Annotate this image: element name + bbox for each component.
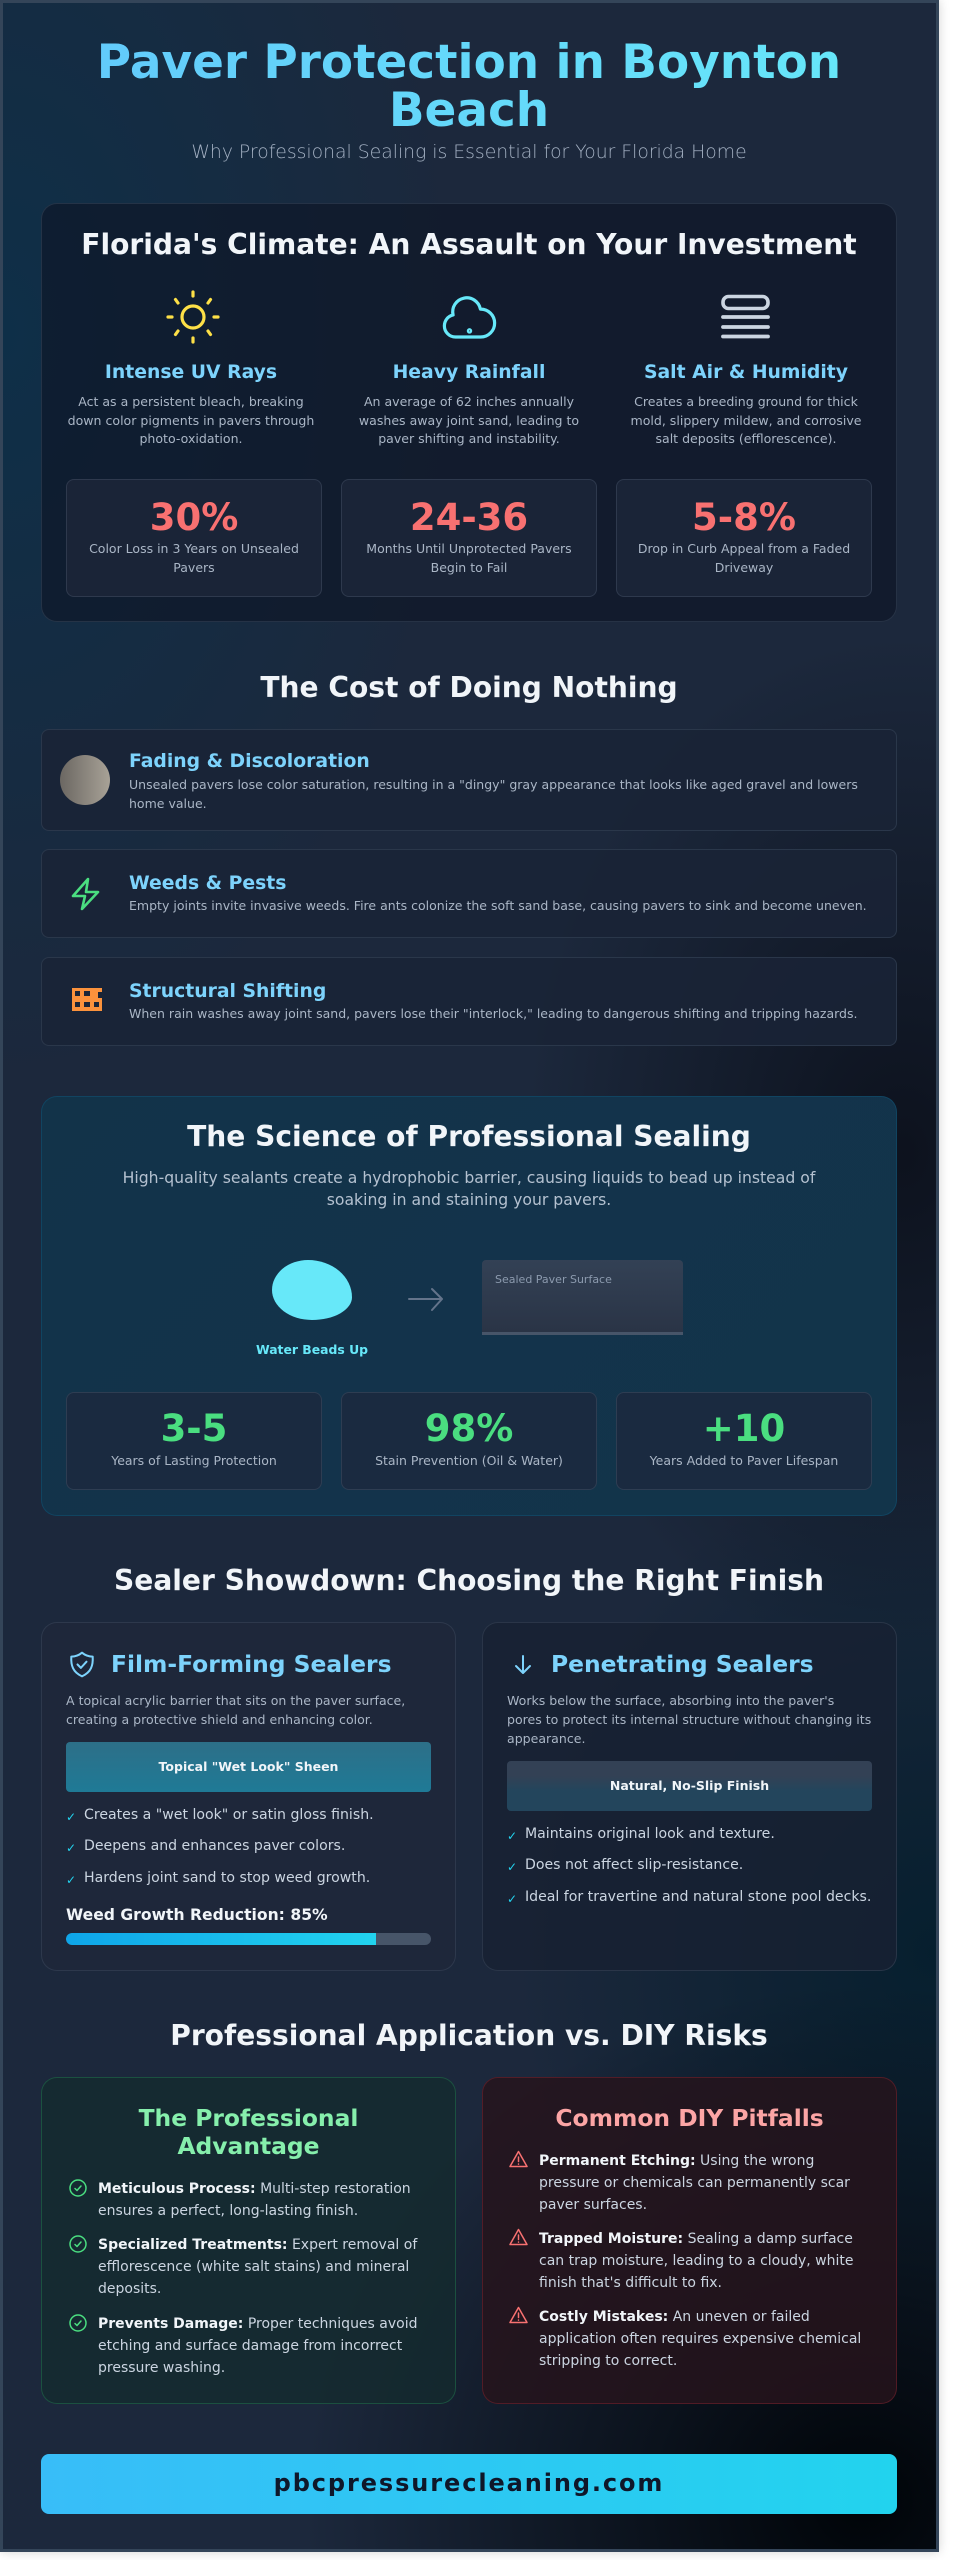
stat: stain <box>341 1392 597 1490</box>
card: professional advantage <box>41 2077 456 2404</box>
wet look sample <box>66 1742 431 1792</box>
pro item 3 <box>69 2314 418 2376</box>
card: fading <box>41 729 897 831</box>
pro item 1: ensures a perfect, long-lasting finish. <box>98 2203 358 2219</box>
pro item 2: Specialized Treatments: Expert removal of <box>98 2237 417 2253</box>
science text: soaking in and staining your pavers. <box>327 1190 611 1209</box>
pro item 2: efflorescence (white salt stains) and mineral <box>98 2259 409 2275</box>
stat: stain: 98% <box>425 1407 513 1450</box>
stat: months: Months Until Unprotected Pavers <box>366 541 572 556</box>
stat: months: 24-36 <box>410 496 528 539</box>
science heading: The Science of Professional Sealing <box>187 1120 751 1153</box>
weeds title: Weeds & Pests <box>129 873 286 894</box>
diy item 1: Permanent Etching: Using the wrong <box>539 2153 814 2169</box>
stat: color loss: Pavers <box>173 560 215 575</box>
fading text: home value. <box>129 796 207 811</box>
stat: years: 3-5 <box>161 1407 227 1450</box>
icon: bricks <box>72 988 102 1011</box>
fading text <box>129 777 858 811</box>
stat: stain: Stain Prevention (Oil & Water) <box>375 1453 563 1468</box>
stat: color loss: Color Loss in 3 Years on Unsealed <box>89 541 299 556</box>
progress bar <box>66 1933 431 1945</box>
penetrating benefits: ✓ <box>507 1829 517 1843</box>
wet look sample: Topical "Wet Look" Sheen <box>159 1759 338 1774</box>
salt text: Creates a breeding ground for thick <box>634 394 858 409</box>
pro item 2 <box>69 2235 418 2297</box>
diy item 1 <box>509 2150 850 2213</box>
penetrating title: Penetrating Sealers <box>551 1650 814 1678</box>
icon: cloud <box>442 296 496 339</box>
penetrating text <box>507 1693 871 1746</box>
penetrating benefits: Does not affect slip-resistance. <box>525 1857 743 1873</box>
card: weeds <box>41 849 897 938</box>
film benefits: Creates a "wet look" or satin gloss finish. <box>84 1807 374 1823</box>
climate heading: Florida's Climate: An Assault on Your Investment <box>81 228 857 261</box>
penetrating text: pores to protect its internal structure without changing its <box>507 1712 871 1727</box>
card: penetrating <box>482 1622 897 1971</box>
diy item 3: application often requires expensive chemical <box>539 2331 861 2347</box>
rain text: An average of 62 inches annually <box>364 394 574 409</box>
UV text: down color pigments in pavers through <box>68 413 314 428</box>
sealed paver surface <box>482 1260 683 1335</box>
diy item 3: stripping to correct. <box>539 2353 677 2369</box>
surface label: Sealed Paver Surface <box>495 1273 612 1286</box>
card: diy pitfalls <box>482 2077 897 2404</box>
stat: lifespan: Years Added to Paver Lifespan <box>650 1453 838 1468</box>
diy item 2: Trapped Moisture: Sealing a damp surface <box>539 2231 853 2247</box>
stat: lifespan <box>616 1392 872 1490</box>
bead label: Water Beads Up <box>256 1342 368 1357</box>
card: film-forming <box>41 1622 456 1971</box>
shifting title: Structural Shifting <box>129 981 326 1002</box>
heading: cost: The Cost of Doing Nothing <box>260 671 678 704</box>
fading title: Fading & Discoloration <box>129 751 370 772</box>
diy item 3 <box>509 2306 861 2369</box>
subtitle: Why Professional Sealing is Essential for Your Florida Home <box>191 142 747 163</box>
diy item 3: Costly Mistakes: An uneven or failed <box>539 2309 810 2325</box>
UV text <box>68 394 314 446</box>
pro item 3: pressure washing. <box>98 2360 225 2376</box>
film text: creating a protective shield and enhancing color. <box>66 1712 373 1727</box>
title <box>41 39 897 135</box>
salt text <box>630 394 862 446</box>
film title: Film-Forming Sealers <box>111 1650 392 1678</box>
stat: curb appeal: 5-8% <box>692 496 796 539</box>
icon: down arrow <box>515 1655 531 1674</box>
penetrating benefits: Maintains original look and texture. <box>525 1826 775 1842</box>
salt text: salt deposits (efflorescence). <box>655 431 837 446</box>
UV text: Act as a persistent bleach, breaking <box>78 394 304 409</box>
penetrating benefits: Ideal for travertine and natural stone pool decks. <box>525 1889 871 1905</box>
climate column: rain: Heavy Rainfall <box>393 362 545 383</box>
film benefits: ✓ <box>66 1841 76 1855</box>
salt text: mold, slippery mildew, and corrosive <box>630 413 862 428</box>
icon: water bead <box>272 1260 352 1320</box>
penetrating benefits: ✓ <box>507 1860 517 1874</box>
science text <box>123 1168 816 1209</box>
icon: salt bars <box>721 294 770 338</box>
rain text: washes away joint sand, leading to <box>359 413 579 428</box>
pro item 1 <box>69 2179 411 2219</box>
penetrating benefits <box>507 1826 871 1906</box>
diy title: Common DIY Pitfalls <box>555 2104 824 2132</box>
natural finish sample <box>507 1761 872 1811</box>
pro item 3: etching and surface damage from incorrect <box>98 2338 402 2354</box>
stat: curb appeal <box>616 479 872 597</box>
climate column: UV: Intense UV Rays <box>105 362 277 383</box>
stat: curb appeal: Drop in Curb Appeal from a Faded <box>638 541 850 556</box>
footer call to action <box>41 2454 897 2514</box>
footer call to action: pbcpressurecleaning.com <box>274 2469 664 2497</box>
film benefits <box>66 1807 374 1887</box>
stat: lifespan: +10 <box>703 1407 785 1450</box>
weed reduction label: Weed Growth Reduction: 85% <box>66 1906 328 1924</box>
heading: pro vs diy: Professional Application vs. DIY Risks <box>170 2019 768 2052</box>
arrow <box>408 1288 443 1311</box>
rain text <box>359 394 579 446</box>
pro title: The Professional <box>139 2104 358 2132</box>
shifting text: When rain washes away joint sand, pavers lose their "interlock," leading to dangerous shifting and tripping hazards. <box>129 1006 858 1021</box>
pro title: Advantage <box>177 2132 320 2160</box>
stat: years <box>66 1392 322 1490</box>
stat: curb appeal: Driveway <box>715 560 773 575</box>
film benefits: ✓ <box>66 1873 76 1887</box>
film benefits: Deepens and enhances paver colors. <box>84 1838 345 1854</box>
penetrating text: Works below the surface, absorbing into the paver's <box>507 1693 834 1708</box>
panel: climate <box>41 203 897 622</box>
diy item 1: paver surfaces. <box>539 2197 647 2213</box>
icon: shield <box>70 1652 94 1678</box>
film text <box>66 1693 405 1727</box>
climate column: salt: Salt Air & Humidity <box>644 362 848 383</box>
pro title <box>138 2104 358 2160</box>
pro item 2: deposits. <box>98 2281 161 2297</box>
pro item 1: Meticulous Process: Multi-step restoration <box>98 2181 411 2197</box>
heading: showdown: Sealer Showdown: Choosing the Right Finish <box>114 1564 824 1597</box>
weeds text: Empty joints invite invasive weeds. Fire ants colonize the soft sand base, causing pavers to sink and become uneven. <box>129 898 867 913</box>
stat: color loss: 30% <box>150 496 238 539</box>
pro item 3: Prevents Damage: Proper techniques avoid <box>98 2316 418 2332</box>
penetrating benefits: ✓ <box>507 1892 517 1906</box>
film benefits: Hardens joint sand to stop weed growth. <box>84 1870 370 1886</box>
diy item 1: pressure or chemicals can permanently scar <box>539 2175 850 2191</box>
rain text: paver shifting and instability. <box>378 431 560 446</box>
panel: science <box>41 1096 897 1516</box>
science text: High-quality sealants create a hydrophobic barrier, causing liquids to bead up instead of <box>123 1168 815 1187</box>
diy item 2: finish that's difficult to fix. <box>539 2275 722 2291</box>
stat: color loss <box>66 479 322 597</box>
icon: sun <box>166 290 220 344</box>
title: Beach <box>389 83 549 138</box>
title: Paver Protection in Boynton <box>97 35 841 90</box>
UV text: photo-oxidation. <box>139 431 243 446</box>
stat: months <box>341 479 597 597</box>
icon: bolt <box>72 878 100 910</box>
penetrating text: appearance. <box>507 1731 585 1746</box>
stat: months: Begin to Fail <box>431 560 507 575</box>
diy item 2 <box>509 2228 854 2291</box>
card: shifting <box>41 957 897 1046</box>
film benefits: ✓ <box>66 1810 76 1824</box>
stat: years: Years of Lasting Protection <box>111 1453 277 1468</box>
natural finish sample: Natural, No-Slip Finish <box>610 1778 769 1793</box>
fading text: Unsealed pavers lose color saturation, resulting in a "dingy" gray appearance that looks like aged gravel and lowers <box>129 777 858 792</box>
icon: faded circle <box>60 755 110 805</box>
diy item 2: can trap moisture, leading to a cloudy, white <box>539 2253 854 2269</box>
film text: A topical acrylic barrier that sits on the paver surface, <box>66 1693 405 1708</box>
